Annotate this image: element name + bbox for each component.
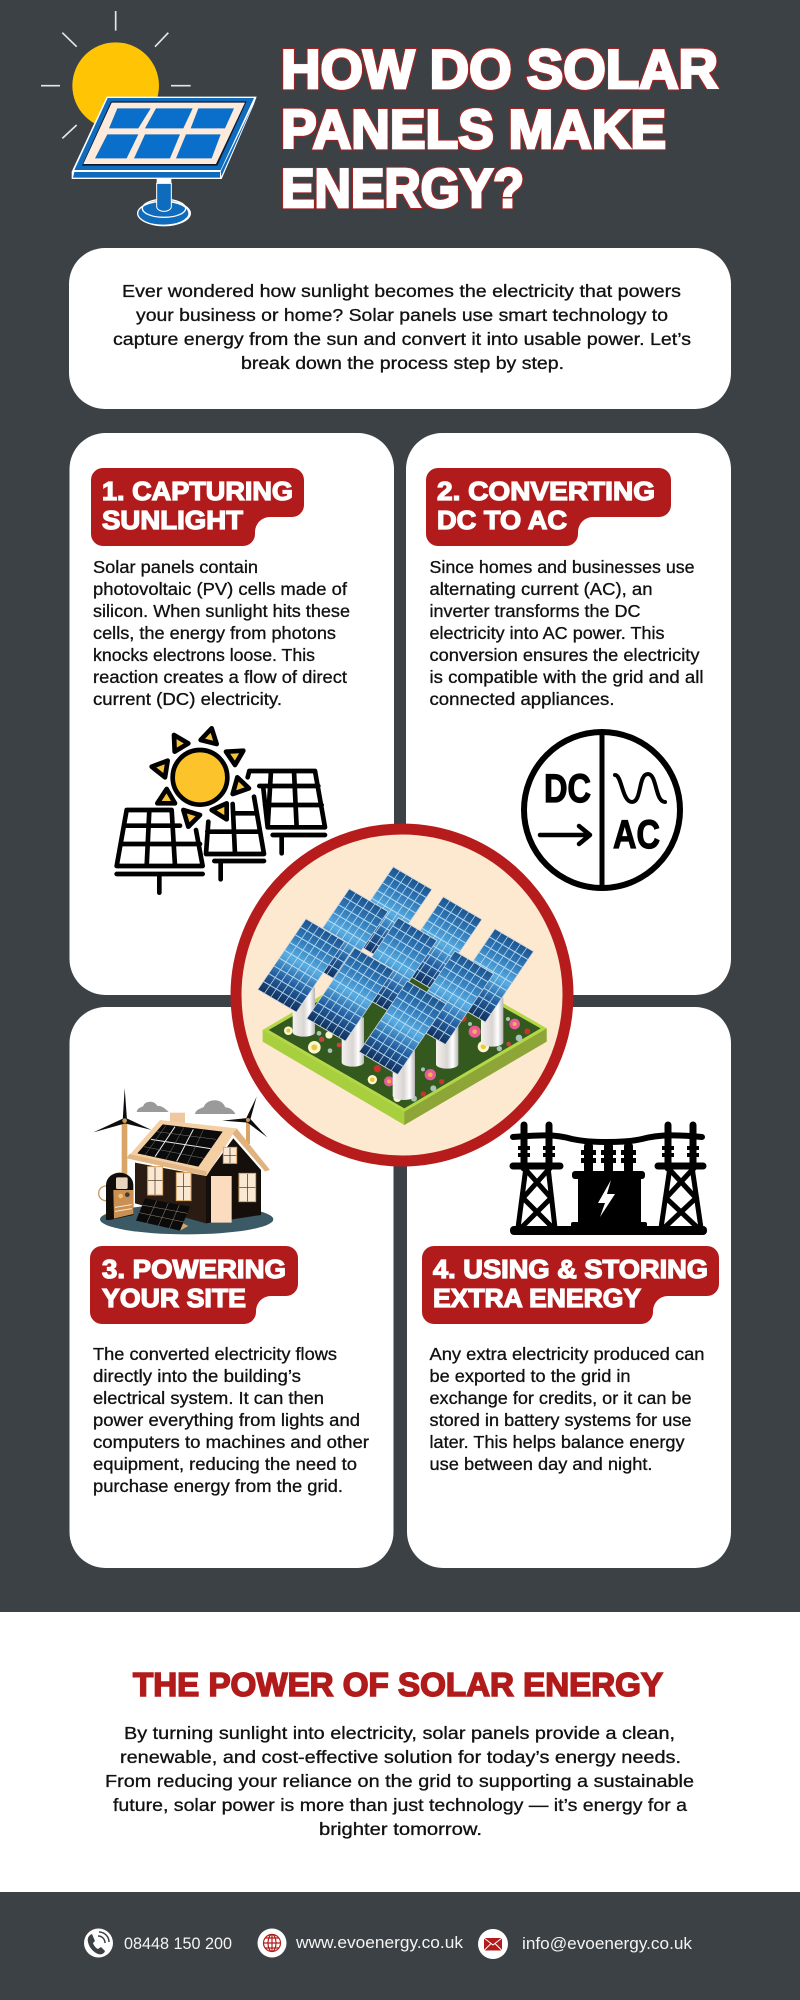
step 4 text: exchange for credits, or it can be: [430, 1388, 692, 1408]
step 2 heading: 2. CONVERTING: [437, 476, 655, 506]
step 1 text: reaction creates a flow of direct: [93, 667, 347, 687]
step 1 text: cells, the energy from photons: [93, 623, 336, 643]
step 4 text: stored in battery systems for use: [430, 1410, 692, 1430]
step 4 heading: [422, 1246, 719, 1324]
solar panel array: [257, 866, 534, 1075]
contact: phone: 08448 150 200: [124, 1934, 232, 1953]
step 2 text: Since homes and businesses use: [430, 557, 694, 577]
right tower: [658, 1125, 703, 1228]
contact: email: [478, 1929, 692, 1959]
intro text: your business or home? Solar panels use smart technology to: [136, 305, 668, 325]
icon: house with solar roof and wind turbines: [93, 1088, 273, 1234]
insulators: [581, 1143, 636, 1173]
wind turbines: [93, 1088, 267, 1177]
title: PANELS MAKE: [281, 98, 666, 160]
section text: From reducing your reliance on the grid to supporting a sustainable: [105, 1771, 694, 1791]
step 2 text: electricity into AC power. This: [430, 623, 665, 643]
icon: sun and solar panel: [41, 11, 257, 226]
step 3 text: computers to machines and other: [93, 1432, 369, 1452]
icon: sun over solar panels: [117, 728, 325, 893]
icon: DC to AC: AC: [613, 813, 660, 857]
step 2 text: inverter transforms the DC: [430, 601, 640, 621]
step 1 text: photovoltaic (PV) cells made of: [93, 579, 347, 599]
title: HOW DO SOLAR: [281, 38, 718, 100]
contact: email: info@evoenergy.co.uk: [522, 1934, 692, 1953]
contact: website: [258, 1928, 463, 1958]
step 4 text: Any extra electricity produced can: [430, 1344, 704, 1364]
step 2 text: conversion ensures the electricity: [430, 645, 700, 665]
section text: brighter tomorrow.: [319, 1819, 482, 1839]
step 3 text: purchase energy from the grid.: [93, 1476, 343, 1496]
step 1 text: current (DC) electricity.: [93, 689, 282, 709]
panel: step 2: [406, 433, 731, 995]
clouds: [137, 1100, 235, 1114]
pillars: [293, 987, 503, 1100]
step 1 text: knocks electrons loose. This: [93, 645, 315, 665]
ground panel: [180, 1222, 188, 1231]
contact: phone: [84, 1928, 232, 1958]
step 2 text: alternating current (AC), an: [430, 579, 652, 599]
step 3 heading: 3. POWERING: [102, 1254, 286, 1284]
ground platform: [263, 947, 547, 1125]
contact: website: www.evoenergy.co.uk: [295, 1933, 463, 1952]
step 2 heading: [426, 468, 671, 546]
step 4 text: use between day and night.: [430, 1454, 652, 1474]
step 3 text: power everything from lights and: [93, 1410, 360, 1430]
central circle: solar farm illustration: [236, 829, 568, 1161]
step 3 text: electrical system. It can then: [93, 1388, 324, 1408]
panel: the power of solar energy: [0, 1612, 800, 1892]
intro text: [113, 281, 691, 373]
sun rays: [41, 11, 191, 138]
step 3 text: [93, 1344, 369, 1496]
title: [281, 38, 718, 219]
step 3 text: The converted electricity flows: [93, 1344, 337, 1364]
step 3 heading: YOUR SITE: [102, 1283, 246, 1313]
section text: By turning sunlight into electricity, solar panels provide a clean,: [124, 1723, 675, 1743]
intro text: capture energy from the sun and convert it into usable power. Let’s: [113, 329, 691, 349]
intro text: Ever wondered how sunlight becomes the electricity that powers: [122, 281, 681, 301]
step 3 text: directly into the building’s: [93, 1366, 301, 1386]
step 2 text: is compatible with the grid and all: [430, 667, 704, 687]
panel: step 3: [70, 1007, 394, 1568]
icon: pylons and transformer: [510, 1125, 707, 1235]
section text: [105, 1723, 694, 1839]
step 4 text: [430, 1344, 704, 1474]
sun disc: [72, 42, 159, 129]
step 2 heading: DC TO AC: [437, 505, 567, 535]
footer: [0, 1892, 800, 2000]
section heading: THE POWER OF SOLAR ENERGY: [133, 1666, 663, 1703]
step 3 text: equipment, reducing the need to: [93, 1454, 357, 1474]
section text: renewable, and cost-effective solution for today’s energy needs.: [120, 1747, 681, 1767]
panel: step 4: [407, 1007, 731, 1568]
transformer: [571, 1171, 647, 1228]
flowers: [284, 1015, 530, 1102]
step 1 heading: SUNLIGHT: [102, 505, 243, 535]
step 4 text: be exported to the grid in: [430, 1366, 630, 1386]
step 3 heading: [90, 1246, 298, 1324]
step 1 text: [93, 557, 350, 709]
step 4 heading: 4. USING & STORING: [433, 1254, 708, 1284]
step 1 text: Solar panels contain: [93, 557, 258, 577]
step 1 heading: [91, 468, 304, 546]
section text: future, solar power is more than just technology — it’s energy for a: [113, 1795, 687, 1815]
step 2 text: [430, 557, 704, 709]
step 1 text: silicon. When sunlight hits these: [93, 601, 350, 621]
panel: step 1: [70, 433, 394, 995]
intro text: break down the process step by step.: [241, 353, 564, 373]
step 4 heading: EXTRA ENERGY: [433, 1283, 641, 1313]
charger: [99, 1173, 133, 1220]
panel stand: [137, 179, 191, 226]
step 1 heading: 1. CAPTURING: [102, 476, 293, 506]
step 4 text: later. This helps balance energy: [430, 1432, 685, 1452]
icon: DC to AC: [524, 730, 680, 890]
title: ENERGY?: [281, 157, 524, 219]
panel: intro: [69, 248, 731, 409]
left tower: [513, 1125, 560, 1228]
icon: DC to AC: DC: [544, 767, 591, 811]
step 2 text: connected appliances.: [430, 689, 614, 709]
panel frame: [72, 97, 257, 179]
house: [127, 1113, 270, 1223]
